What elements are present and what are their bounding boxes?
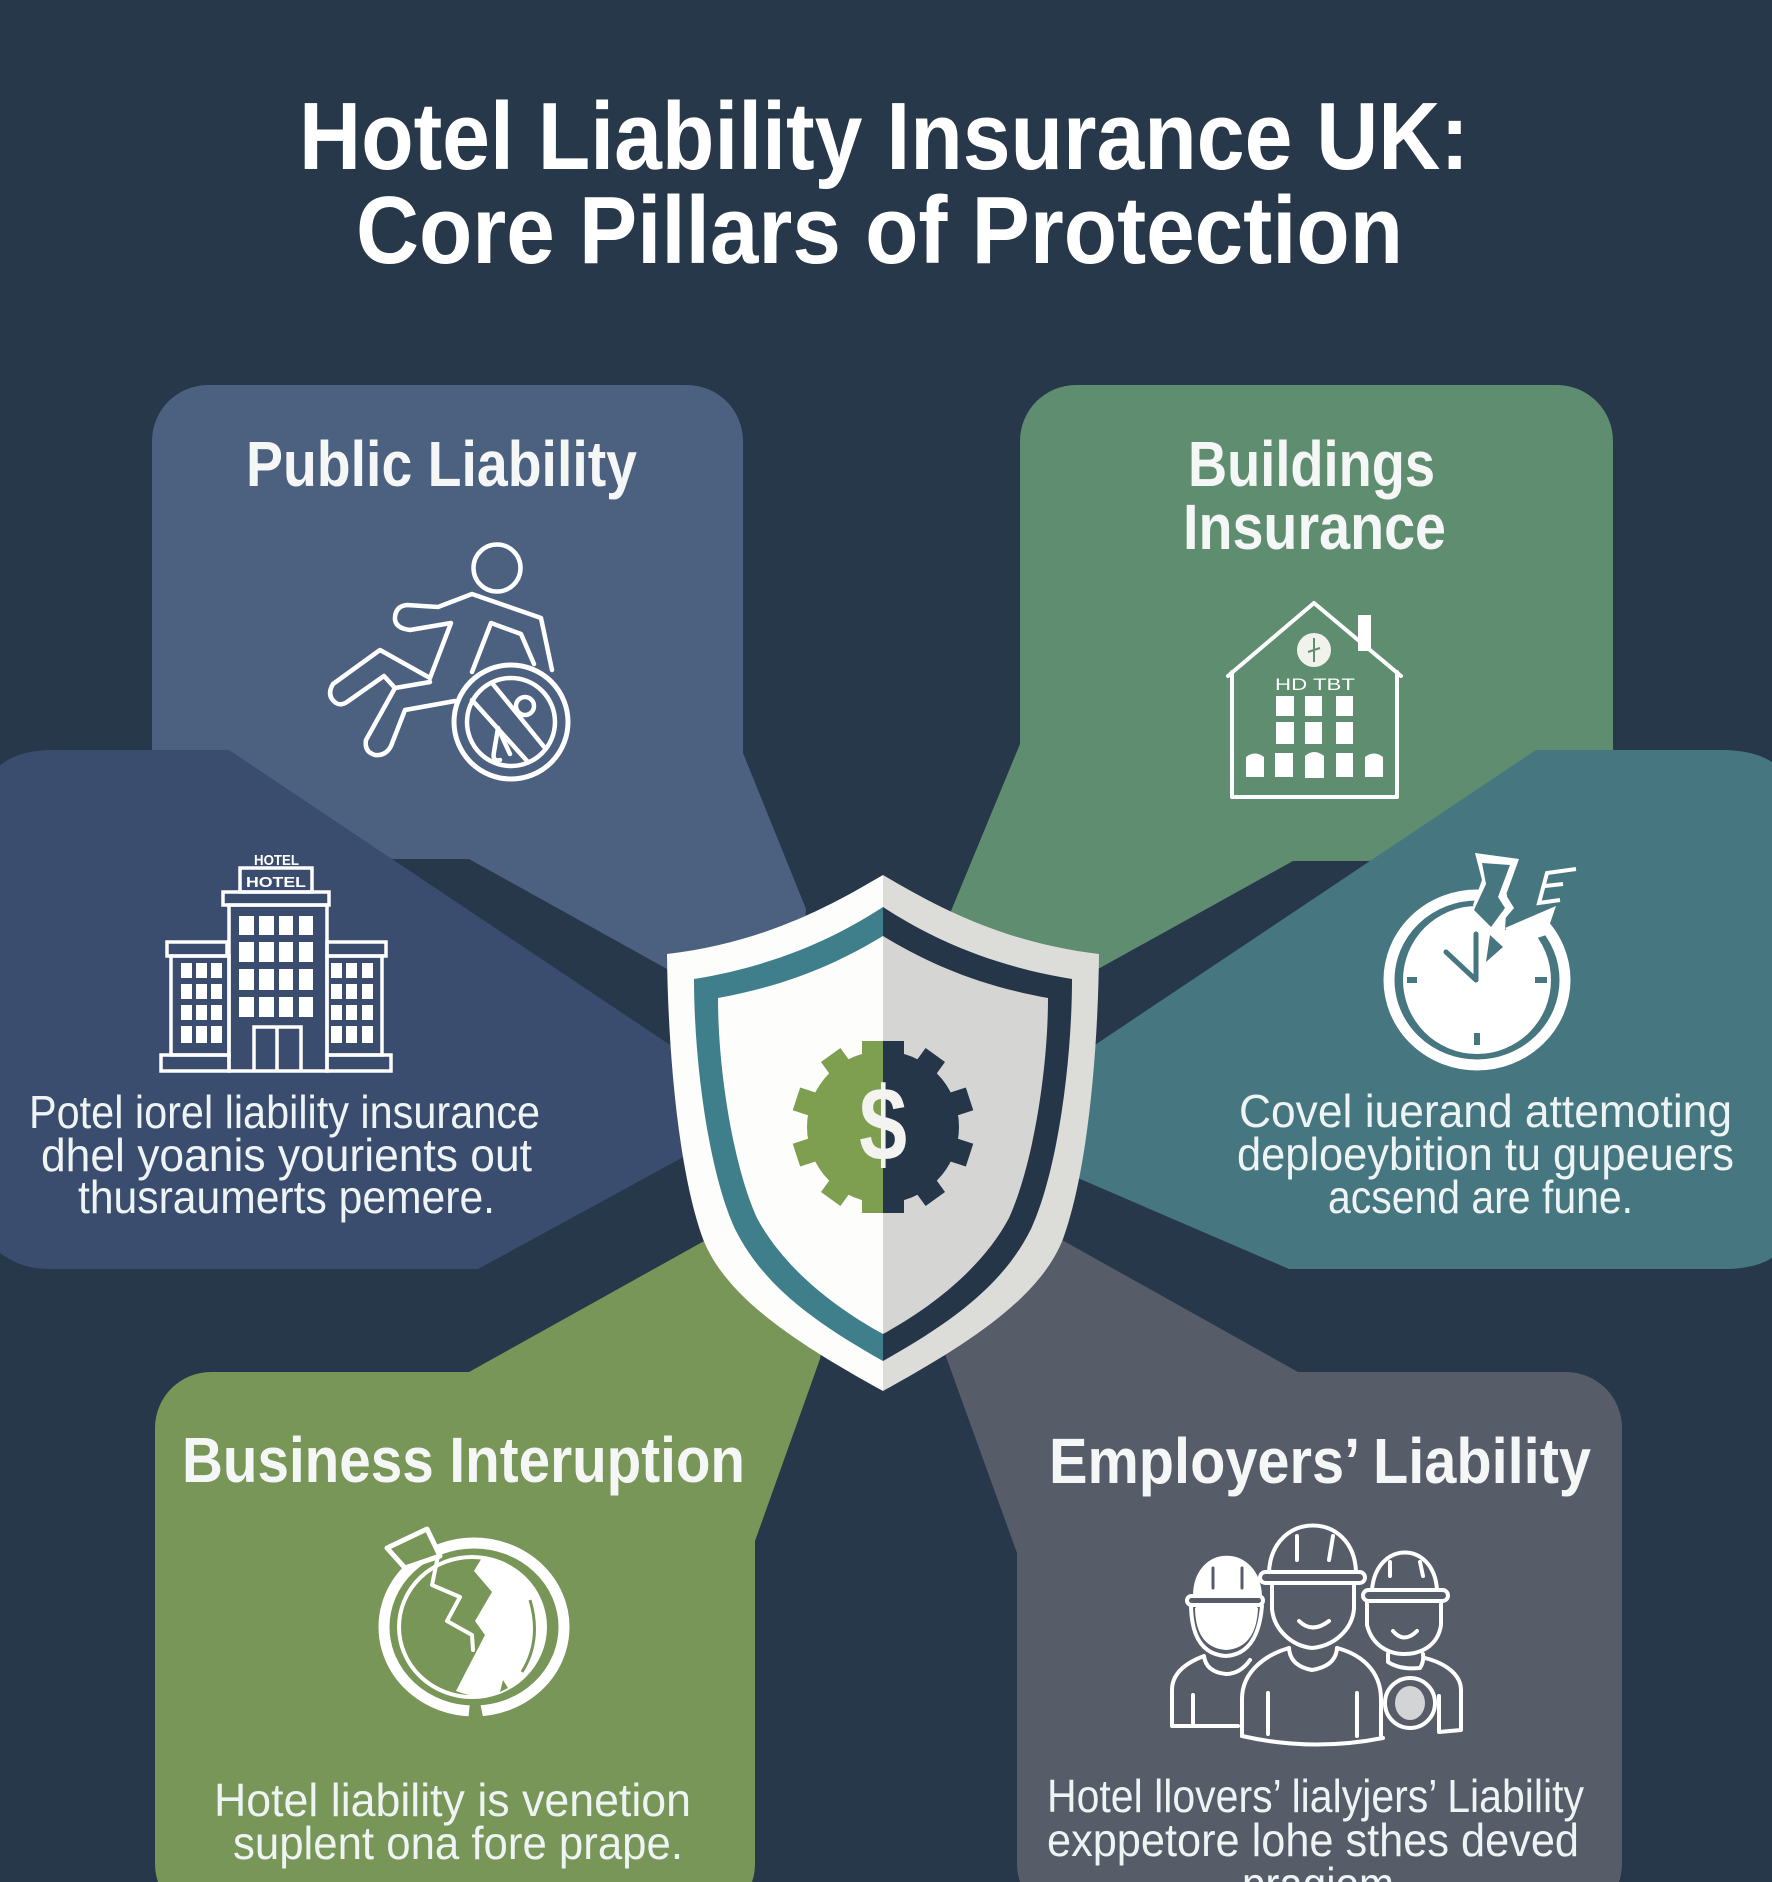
text block: cover description (1237, 1085, 1734, 1223)
centre worker (1242, 1526, 1383, 1745)
icon: cracked clock (1389, 853, 1576, 1065)
panel: teal business continuity (1050, 750, 1772, 1269)
icon: gear with dollar sign: $ (859, 1066, 907, 1183)
title: Core Pillars of Protection (356, 177, 1403, 284)
shield right half (883, 875, 1099, 1391)
panel: business interruption (155, 1240, 830, 1882)
left worker (1172, 1558, 1263, 1726)
title (299, 83, 1469, 284)
text block: business interruption description: Hotel liability is venetion (214, 1774, 691, 1826)
icon: hotel building: HOTEL (246, 874, 306, 891)
icon: three workers in hard hats (1172, 1526, 1461, 1745)
central shield (667, 875, 1099, 1391)
text block: cover description: deploeybition tu gupeuers (1237, 1128, 1734, 1180)
icon: hotel building (161, 852, 391, 1071)
text block: cover description: acsend are fune. (1328, 1171, 1633, 1223)
right worker (1363, 1552, 1461, 1732)
panel: hotel public liability (0, 750, 720, 1269)
icon: hotel house: HD TBT (1275, 675, 1355, 694)
text block: employers liability description: Hotel llovers’ lialyjers’ Liability (1047, 1770, 1584, 1822)
text block: hotel liability description: Potel iorel liability insurance (29, 1086, 540, 1138)
icon: hotel building: HOTEL (254, 852, 299, 869)
text block: hotel liability description: dhel yoanis yourients out (41, 1129, 532, 1181)
panel: employers liability (940, 1205, 1622, 1882)
text block: employers liability description (1047, 1770, 1584, 1882)
title: Hotel Liability Insurance UK: (299, 83, 1469, 190)
shield left half (667, 875, 883, 1391)
text block: hotel liability description (29, 1086, 540, 1223)
heading: employers liability: Employers’ Liability (1049, 1425, 1591, 1497)
text block: business interruption description: suplent ona fore prape. (233, 1817, 683, 1869)
heading: buildings insurance: Insurance (1183, 491, 1446, 563)
text block: employers liability description: exppetore lohe sthes deved (1047, 1814, 1579, 1866)
text block: cover description: Covel iuerand attemoting (1239, 1085, 1732, 1137)
panel: public liability (152, 385, 806, 1000)
icon: hotel house (1228, 603, 1401, 797)
text block: business interruption description (214, 1774, 691, 1869)
panel: buildings insurance (951, 385, 1613, 1000)
heading: buildings insurance: Buildings (1188, 428, 1435, 500)
heading: public liability: Public Liability (246, 428, 637, 500)
icon: person falling with prohibition sign (330, 544, 568, 779)
heading: buildings insurance (1183, 428, 1446, 563)
heading: business interruption: Business Interuption (182, 1424, 745, 1496)
icon: gear with dollar sign (793, 1041, 973, 1213)
text block: hotel liability description: thusraumerts pemere. (78, 1171, 495, 1223)
icon: broken globe (384, 1529, 564, 1722)
